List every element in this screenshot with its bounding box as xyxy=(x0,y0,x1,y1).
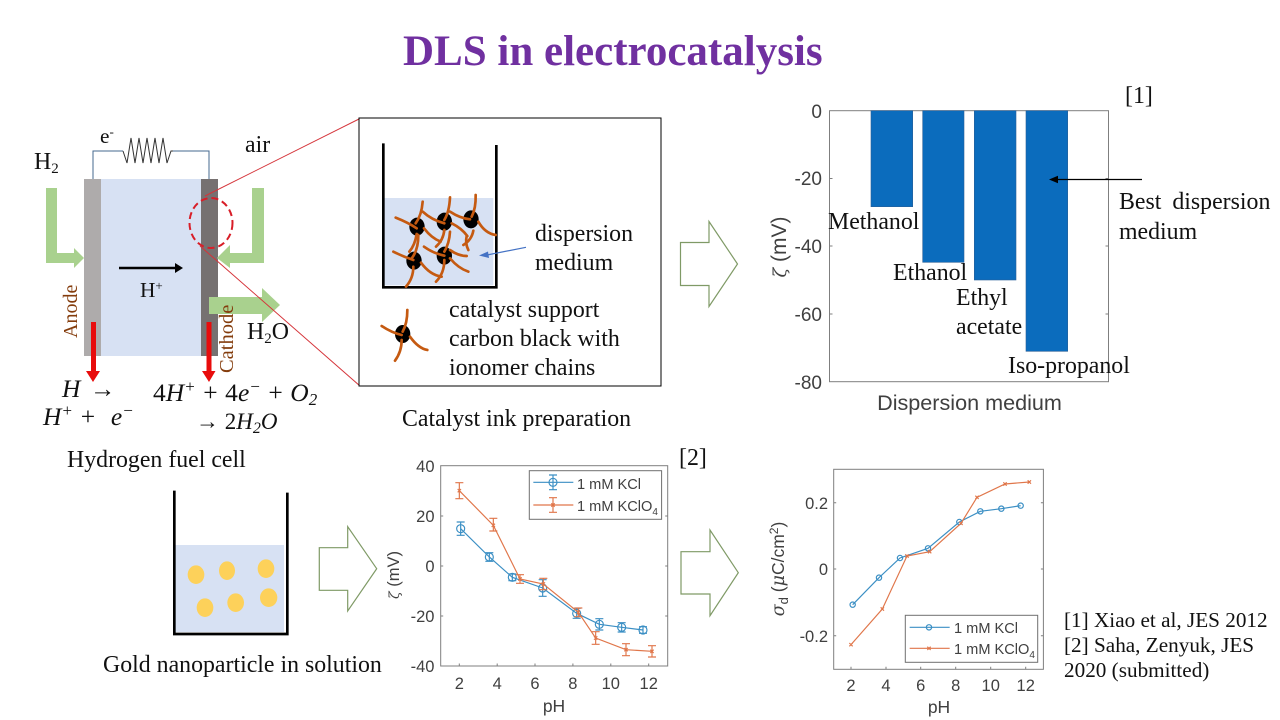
icon: air inlet arrow xyxy=(217,188,264,268)
icon: water outlet arrow xyxy=(209,288,280,322)
zoom circle xyxy=(190,198,232,248)
electrolyte xyxy=(101,179,201,356)
title: DLS in electrocatalysis xyxy=(403,28,823,75)
x axis label: pH xyxy=(928,697,950,717)
tick labels: 0 xyxy=(425,558,434,576)
icon: dispersion medium pointer xyxy=(479,247,526,258)
tick labels xyxy=(800,495,1035,695)
tick labels: 20 xyxy=(416,508,434,526)
gold nanoparticles xyxy=(188,559,277,617)
references: [1] Xiao et al, JES 2012 xyxy=(1064,608,1268,632)
references: 2020 (submitted) xyxy=(1064,658,1209,682)
tick labels xyxy=(411,458,658,693)
y tick labels: -60 xyxy=(795,305,822,326)
label: proton: H xyxy=(140,278,155,302)
anode plate xyxy=(84,179,101,356)
label: electron: e xyxy=(100,124,109,148)
cathode equation: + xyxy=(184,377,196,396)
chart: zeta potential vs pH xyxy=(385,458,668,716)
cathode equation: 4H xyxy=(153,378,184,407)
label: dispersion medium: medium xyxy=(535,250,614,276)
label: air: air xyxy=(245,132,270,158)
tick labels: 2 xyxy=(455,675,464,693)
y axis label: σ xyxy=(769,603,789,616)
tick labels: 8 xyxy=(951,677,960,695)
label: catalyst support: catalyst support xyxy=(449,297,599,323)
series xyxy=(849,480,1031,646)
x axis label: pH xyxy=(543,696,565,716)
tick labels: 0 xyxy=(819,561,828,579)
tick labels: 12 xyxy=(640,675,658,693)
tick labels: 2 xyxy=(846,677,856,695)
tick labels: -40 xyxy=(411,658,434,676)
plot frame xyxy=(441,466,668,666)
series: 1 mM KClO4 xyxy=(849,480,1031,646)
cathode equation: 2 xyxy=(309,390,318,409)
anode equation: + xyxy=(73,402,111,431)
y axis label: 2 xyxy=(767,527,781,534)
citation marker 1: [1] xyxy=(1125,83,1153,109)
y axis label: ( xyxy=(768,586,788,597)
anode equation: + xyxy=(61,401,73,420)
tick labels: -20 xyxy=(411,608,434,626)
ticks xyxy=(834,503,1043,669)
icon: hydrogen inlet arrow xyxy=(46,188,84,268)
tick labels: -0.2 xyxy=(800,628,828,646)
panel: hydrogen fuel cell xyxy=(34,119,360,473)
y ticks xyxy=(830,178,1108,314)
anode equation: − xyxy=(122,401,134,420)
legend xyxy=(905,615,1038,662)
label: anode: Anode xyxy=(60,285,82,338)
cathode equation: → 2H xyxy=(196,409,253,434)
anode equation: → xyxy=(90,374,116,403)
bar labels: Methanol xyxy=(828,209,920,235)
tick labels: 4 xyxy=(493,675,502,693)
cathode equation: + 4 xyxy=(196,378,238,407)
legend: 4 xyxy=(1029,650,1035,661)
plot frame xyxy=(830,111,1108,382)
panel: catalyst ink xyxy=(359,118,661,386)
cathode equation: e xyxy=(238,378,249,407)
arrow: ink to zeta chart xyxy=(680,222,738,306)
legend xyxy=(529,471,662,519)
tick labels: 10 xyxy=(982,677,1000,695)
cathode equation: 2 xyxy=(253,420,261,437)
beaker walls xyxy=(174,491,287,634)
y tick labels xyxy=(795,102,822,394)
series: 1 mM KClO4 xyxy=(455,483,656,657)
tick labels: 6 xyxy=(916,677,925,695)
anode equation: H xyxy=(62,374,80,403)
label: water: O xyxy=(272,319,289,345)
caption: gold nanoparticle: Gold nanoparticle in solution xyxy=(103,652,382,678)
legend: 4 xyxy=(652,507,658,518)
label: dispersion medium: dispersion xyxy=(535,221,633,247)
label: cathode: Cathode xyxy=(216,305,238,373)
bar labels: acetate xyxy=(956,314,1022,340)
citation marker 2: [2] xyxy=(679,445,707,471)
legend: 1 mM KClO xyxy=(954,642,1029,658)
bar labels: Ethyl xyxy=(956,285,1008,311)
tick labels: 8 xyxy=(568,675,577,693)
caption: hydrogen fuel cell: Hydrogen fuel cell xyxy=(67,447,246,473)
references: [2] Saha, Zenyuk, JES xyxy=(1064,633,1254,657)
bar labels: Iso-propanol xyxy=(1008,353,1130,379)
bars xyxy=(871,111,1068,351)
anode equation: H xyxy=(43,402,61,431)
ticks xyxy=(441,516,668,666)
y tick labels: 0 xyxy=(811,102,822,123)
arrow: zeta to charge density chart xyxy=(681,530,738,616)
tick labels: 10 xyxy=(602,675,620,693)
bar labels xyxy=(828,209,1130,379)
cathode equation: + xyxy=(261,378,290,407)
arrow: gold to zeta chart xyxy=(319,527,377,611)
callout: best dispersion medium: medium xyxy=(1119,219,1198,245)
y axis label: ) xyxy=(768,522,788,528)
y tick labels: -40 xyxy=(795,237,822,258)
y axis label: ζ (mV) xyxy=(385,551,403,599)
label: proton: + xyxy=(155,278,163,293)
callout: best dispersion medium: Best dispersion xyxy=(1119,189,1270,215)
bar labels: Ethanol xyxy=(893,260,968,286)
cathode equation: − xyxy=(249,377,261,396)
series: 1 mM KCl xyxy=(850,503,1023,607)
plot frame xyxy=(834,469,1043,669)
icon: cathode reaction arrow xyxy=(202,322,216,382)
label: H2: 2 xyxy=(51,161,59,177)
callout arrow: best medium xyxy=(1049,176,1142,183)
cathode plate xyxy=(201,179,218,356)
cathode equation xyxy=(153,377,318,437)
beaker with ink xyxy=(383,143,496,287)
y tick labels: -20 xyxy=(795,169,822,190)
series xyxy=(455,483,656,657)
legend: 1 mM KCl xyxy=(954,621,1018,637)
panel: gold nanoparticle beaker xyxy=(174,491,287,634)
icon: anode reaction arrow xyxy=(86,322,100,382)
anode equation: e xyxy=(111,402,122,431)
chart: zeta potential by dispersion medium xyxy=(768,102,1270,415)
anode equation xyxy=(42,374,134,431)
y axis label: μC/cm xyxy=(768,534,789,586)
external circuit with resistor xyxy=(93,138,209,179)
zoom callout lines xyxy=(200,119,360,386)
cathode equation: O xyxy=(290,378,309,407)
legend: 1 mM KClO xyxy=(577,499,652,515)
x axis label: Dispersion medium xyxy=(877,390,1062,415)
chart: surface charge density vs pH xyxy=(767,469,1043,717)
y axis label: d xyxy=(776,597,791,604)
label: water: 2 xyxy=(264,331,272,347)
tick labels: 4 xyxy=(881,677,891,695)
tick labels: 12 xyxy=(1017,677,1035,695)
panel frame xyxy=(359,118,661,386)
solution xyxy=(175,545,284,632)
label: electron: - xyxy=(109,124,114,139)
icon: proton arrow xyxy=(119,263,183,273)
tick labels: 40 xyxy=(416,458,434,476)
y axis label: ζ (mV) xyxy=(768,216,791,278)
caption: catalyst ink preparation: Catalyst ink preparation xyxy=(402,406,631,432)
label: water: H xyxy=(247,319,264,345)
cathode equation: O xyxy=(261,409,278,434)
tick labels: 6 xyxy=(530,675,540,693)
legend: 1 mM KCl xyxy=(577,477,641,493)
label: catalyst support: ionomer chains xyxy=(449,355,595,381)
icon: catalyst particle legend xyxy=(382,310,427,361)
y tick labels: -80 xyxy=(795,373,822,394)
tick labels: 0.2 xyxy=(805,495,828,513)
label: catalyst support: carbon black with xyxy=(449,326,620,352)
label: H2: H xyxy=(34,149,51,175)
series: 1 mM KCl xyxy=(457,522,647,634)
